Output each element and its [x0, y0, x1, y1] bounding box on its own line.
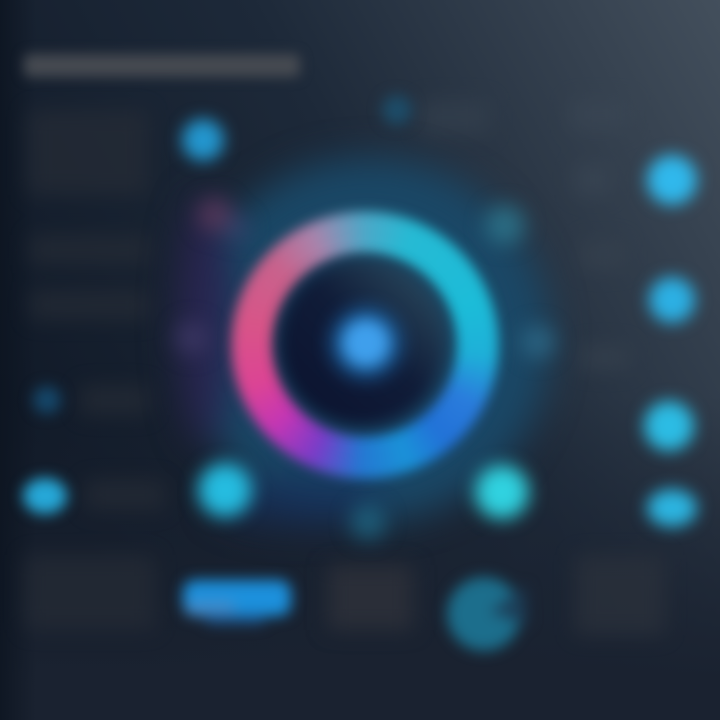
icon: top small marker — [382, 95, 412, 125]
icon: centre dot glow and body — [330, 307, 402, 379]
panel: bottom and right blocks — [420, 100, 665, 635]
chart halo — [177, 158, 550, 525]
icon: lower left large dot — [198, 463, 252, 517]
panel: bottom centre block — [328, 565, 413, 630]
title bar — [24, 54, 300, 77]
icon: lower right large dot — [475, 465, 529, 519]
halo marks — [175, 197, 555, 540]
icon: left small dot — [33, 386, 61, 414]
icon: top-left dot — [182, 119, 224, 161]
icon: bottom gauge — [447, 577, 528, 651]
icon: right dot 2 — [649, 277, 695, 323]
panel: left column blocks — [25, 110, 165, 630]
icon: bottom-left dot — [23, 478, 67, 514]
donut chart — [222, 204, 506, 486]
icon: right dot 1 — [647, 155, 697, 205]
icon: right dot 4 — [647, 489, 697, 527]
donut inner core — [278, 259, 446, 427]
button: bottom pill — [183, 580, 291, 624]
icon: right dot 3 — [644, 401, 694, 451]
